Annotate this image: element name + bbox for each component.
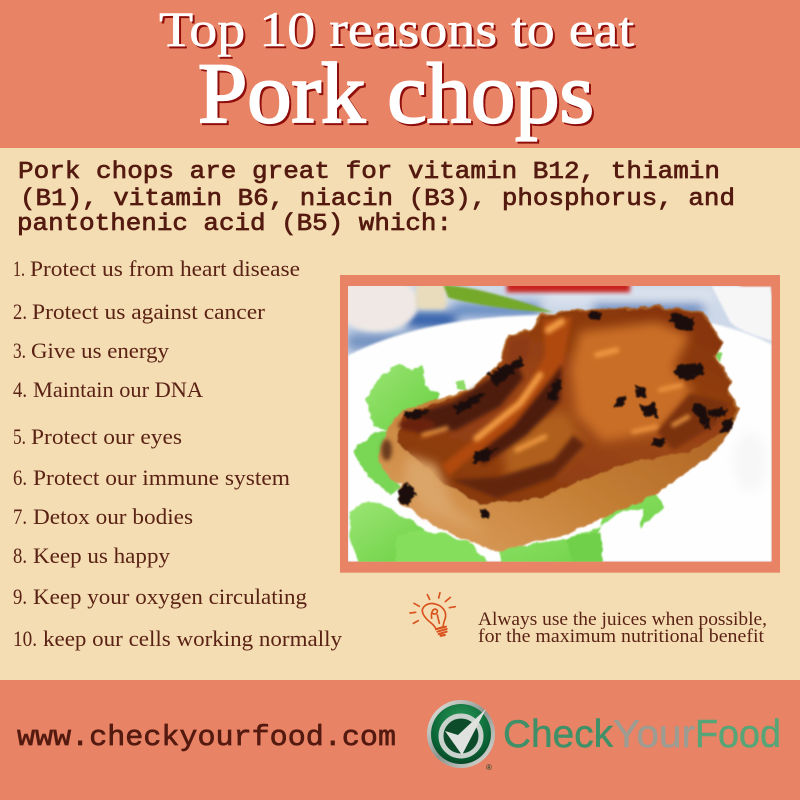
list of ten reasons: Protect our immune system [33,465,290,490]
pork chops [378,307,740,552]
list of ten reasons: 6. [13,465,27,490]
list of ten reasons: 4. [13,377,27,402]
list of ten reasons: 3. [13,338,26,363]
plate [348,315,772,562]
title line: Top 10 reasons to eat: Top 10 reasons to eat [161,3,636,59]
intro paragraph: pantothenic acid (B5) which: [17,211,452,238]
list of ten reasons [13,256,342,651]
list of ten reasons: 7. [13,504,27,529]
list of ten reasons: Maintain our DNA [33,377,203,402]
tip text [478,609,767,647]
list of ten reasons: 8. [13,543,27,568]
tip text: for the maximum nutritional benefit [478,626,765,647]
blurred table background [348,286,772,562]
intro paragraph: Pork chops are great for vitamin B12, thiamin [18,159,720,186]
list of ten reasons: Give us energy [31,338,169,363]
list of ten reasons: 2. [13,299,27,324]
photo panel: grilled pork chops on a plate [335,275,780,573]
list of ten reasons: 1. [13,256,25,281]
intro paragraph: (B1), vitamin B6, niacin (B3), phosphorus, and [20,186,735,213]
list of ten reasons: Detox our bodies [33,504,193,529]
tip text: Always use the juices when possible, [478,609,767,630]
glossy glaze streaks [423,322,688,450]
title line: Top 10 reasons to eat: Top 10 reasons to eat [159,1,634,57]
list of ten reasons: Keep your oxygen circulating [33,584,307,609]
white bowl [712,286,772,341]
logo wordmark [503,713,781,756]
logo icon: green check badge: ® [486,763,492,772]
title line: Pork chops: Pork chops [198,45,594,141]
list of ten reasons: 5. [13,424,26,449]
lettuce [349,352,723,565]
grill char marks [398,312,733,518]
logo wordmark: Check [503,713,613,756]
logo wordmark: Your [613,713,695,756]
list of ten reasons: Protect us from heart disease [30,256,300,281]
header band [0,0,800,148]
logo wordmark: Food [695,713,781,756]
logo icon: green check badge [427,700,495,772]
intro paragraph [17,159,735,238]
green pepper [443,285,553,312]
list of ten reasons: Keep us happy [33,543,170,568]
list of ten reasons: 10. [13,626,37,651]
website url: www.checkyourfood.com [17,721,396,754]
list of ten reasons: Protect us against cancer [32,299,266,324]
red pepper [507,281,630,292]
title line: Pork chops: Pork chops [200,47,596,143]
list of ten reasons: keep our cells working normally [43,626,342,651]
icon: light bulb [410,593,455,636]
footer band [0,680,800,800]
list of ten reasons: 9. [13,584,27,609]
list of ten reasons: Protect our eyes [31,424,182,449]
garlic [348,286,420,334]
